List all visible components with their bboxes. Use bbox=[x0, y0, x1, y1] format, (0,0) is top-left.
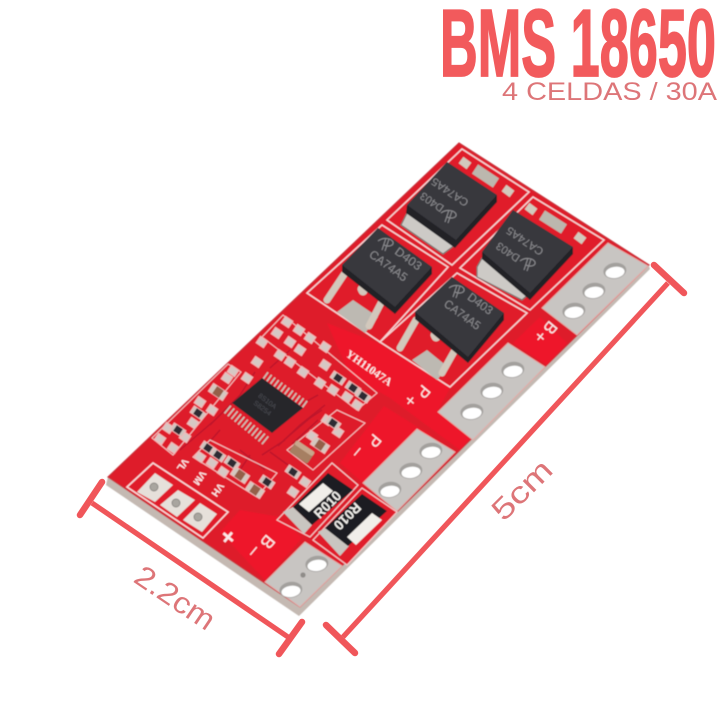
control IC: 8S10A bbox=[256, 393, 278, 411]
silkscreen labels bbox=[174, 317, 561, 562]
mosfet: left: CA74A5 bbox=[366, 247, 411, 285]
mosfet: bottom: D403 bbox=[465, 290, 496, 318]
control IC bbox=[227, 375, 306, 441]
board side thickness bbox=[106, 266, 650, 616]
mosfet: top: D403 bbox=[418, 189, 446, 214]
terminal holes bbox=[278, 261, 627, 599]
silkscreen labels: + bbox=[530, 327, 551, 346]
shunt resistor R010 left bbox=[277, 463, 358, 537]
dimension: 5cm length bbox=[326, 265, 684, 653]
silkscreen labels: – bbox=[348, 443, 369, 463]
label: 2.2cm: 2.2cm bbox=[128, 560, 221, 637]
silkscreen labels: + bbox=[400, 391, 421, 410]
mosfet: right bbox=[477, 206, 584, 300]
subtitle: 4 CELDAS / 30A bbox=[502, 78, 717, 106]
mosfet: bottom: CA74A5 bbox=[441, 297, 484, 333]
silkscreen labels: VH bbox=[209, 481, 226, 498]
small SMD components bbox=[154, 316, 371, 499]
traces bbox=[180, 350, 325, 470]
mosfet outlines bbox=[307, 149, 604, 387]
balance connector pads bbox=[127, 463, 228, 538]
silkscreen labels: P bbox=[363, 430, 385, 451]
mosfet: top: CA74A5 bbox=[430, 175, 471, 208]
mosfet: right: CA74A5 bbox=[505, 224, 546, 257]
silkscreen labels: VM bbox=[190, 468, 208, 487]
silkscreen labels: P bbox=[412, 381, 434, 402]
mosfet: left bbox=[327, 228, 432, 333]
mosfet: left: D403 bbox=[392, 244, 425, 273]
shunt resistor R010 right: R010 bbox=[330, 500, 365, 534]
label: 5cm: 5cm bbox=[485, 453, 559, 527]
mosfet: top bbox=[401, 160, 512, 254]
dimension: 2.2cm width bbox=[80, 482, 302, 654]
silkscreen labels: – bbox=[244, 542, 265, 562]
bright copper pours bbox=[220, 317, 567, 580]
shunt resistor R010 right bbox=[313, 488, 397, 565]
control IC: S8254 bbox=[252, 400, 272, 418]
silkscreen labels: B bbox=[256, 531, 279, 553]
silver terminal pads bbox=[265, 243, 648, 607]
component cluster outlines bbox=[152, 315, 377, 497]
shunt resistor R010 left: R010 bbox=[310, 487, 345, 521]
silkscreen labels: + bbox=[213, 523, 243, 551]
mosfet: bottom bbox=[400, 277, 504, 380]
silkscreen labels: B bbox=[539, 317, 561, 338]
large capacitor bbox=[289, 440, 315, 464]
silkscreen labels: YH11047A bbox=[343, 348, 395, 389]
BMS circuit board bbox=[106, 143, 650, 616]
mosfet: right: D403 bbox=[494, 239, 522, 264]
board top face bbox=[108, 143, 649, 607]
silkscreen labels: VL bbox=[174, 456, 190, 473]
